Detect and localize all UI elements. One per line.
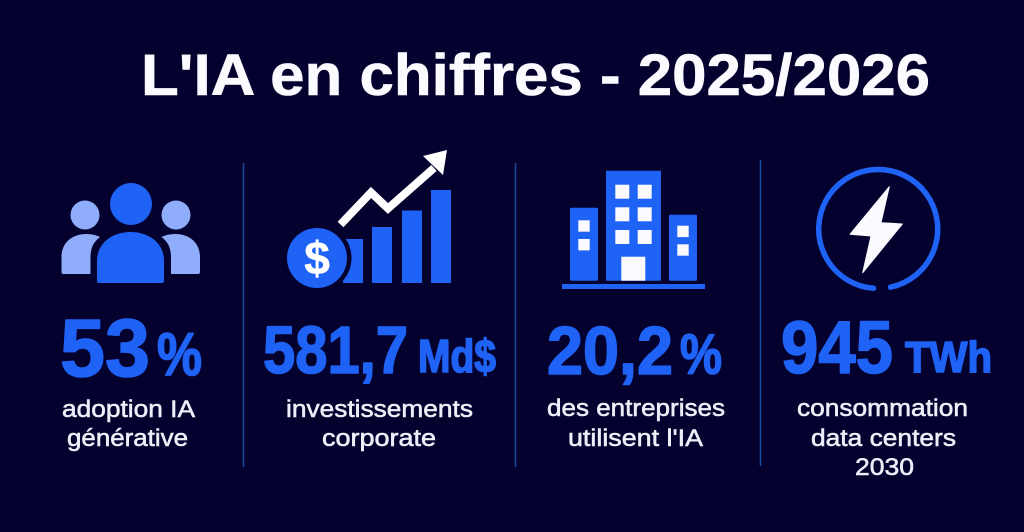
label: companies: utilisent l'IA [568,425,703,452]
stat: 53%: 53 [60,303,150,394]
panel: adoption [60,183,202,452]
label: investments [286,396,473,452]
icon: lightning in ring [819,169,938,288]
stat: 581,7 Md$: Md$ [418,330,496,382]
icon: growth chart with coin: $ [304,232,330,284]
label: adoption: adoption IA [62,396,195,423]
panel: investments [263,150,496,452]
label: energy: 2030 [855,454,914,481]
label: adoption [62,396,195,452]
panel: energy [781,169,992,481]
title: L'IA en chiffres - 2025/2026 [141,43,930,108]
stat: 20,2%: 20,2 [547,313,673,389]
stat: 945 TWh: TWh [905,333,992,382]
stat: 53%: % [157,321,202,388]
stat: 53% [60,303,202,394]
label: energy [797,395,968,481]
stat: 581,7 Md$: 581,7 [263,313,408,388]
stat: 945 TWh [781,306,992,389]
label: companies [547,395,725,452]
stat: 20,2%: % [680,322,722,386]
icon: growth chart with coin [282,150,451,292]
label: energy: data centers [811,425,956,452]
label: investments: investissements [286,396,473,423]
label: energy: consommation [797,395,968,422]
icon: buildings [562,171,705,289]
panel: companies [547,171,725,452]
label: investments: corporate [322,425,436,452]
icon: people [62,183,200,283]
stat: 945 TWh: 945 [781,306,893,389]
label: companies: des entreprises [547,395,725,422]
label: adoption: générative [67,425,188,452]
